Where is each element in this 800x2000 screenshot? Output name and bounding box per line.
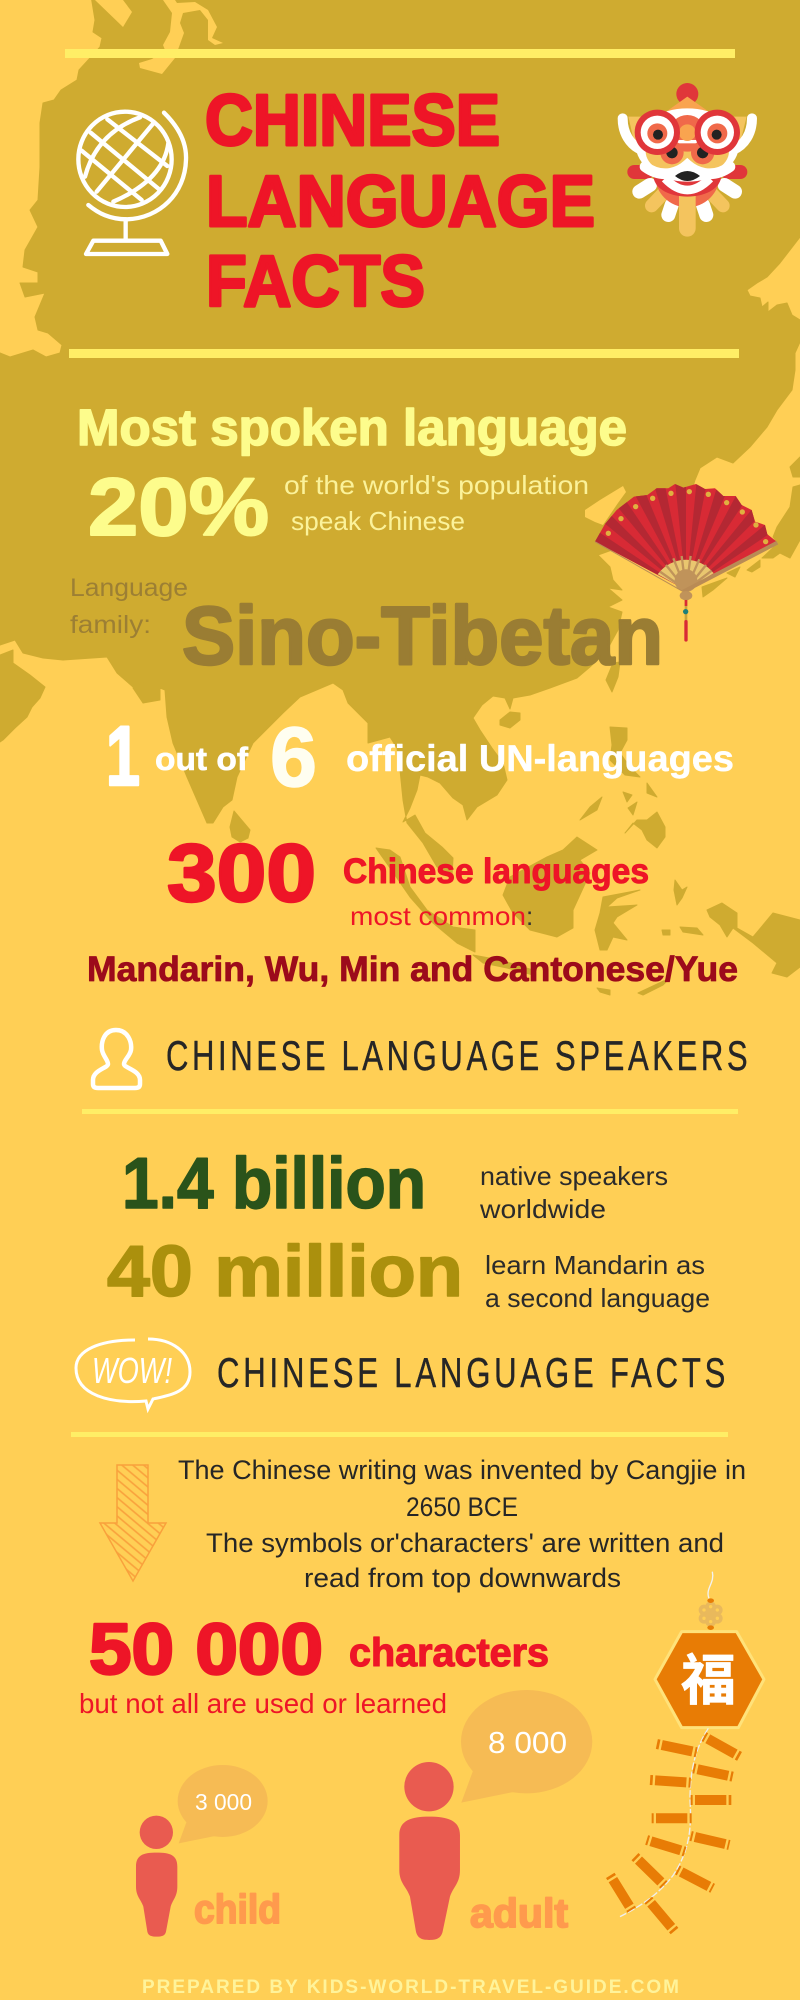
text: Chinese writing: The symbols or'characters' are written and xyxy=(206,1528,724,1558)
heading: Chinese language speakers: CHINESE LANGUAGE SPEAKERS xyxy=(166,1032,748,1079)
icon: wow speech bubble xyxy=(76,1339,190,1409)
text: world's population: speak Chinese xyxy=(291,506,465,536)
text: learn Mandarin xyxy=(485,1250,710,1313)
stat: 300 Chinese languages: 300 xyxy=(167,828,316,919)
stat: 1 out of 6 official UN-languages xyxy=(106,709,734,804)
text: language family: Language xyxy=(70,574,188,602)
stat: 50 000 characters: characters xyxy=(349,1631,549,1675)
heading: Chinese language facts: CHINESE LANGUAGE FACTS xyxy=(217,1349,725,1396)
icon: wow speech bubble: WOW! xyxy=(92,1350,172,1391)
icon: lucky charm with firecrackers: 福 xyxy=(681,1635,736,1715)
stat: 1 out of 6 official UN-languages: out of xyxy=(155,741,248,777)
footer credit: PREPARED BY KIDS-WORLD-TRAVEL-GUIDE.COM xyxy=(142,1977,679,1998)
heading: Sino-Tibetan: Sino-Tibetan xyxy=(182,589,663,682)
stat: 1.4 billion: 1.4 billion xyxy=(122,1144,426,1224)
stat: 1 out of 6 official UN-languages: official UN-languages xyxy=(346,738,734,779)
stat: 300 Chinese languages: Chinese languages xyxy=(343,852,649,891)
top title rule xyxy=(65,49,735,58)
text: most common languages: Mandarin, Wu, Min and Cantonese/Yue xyxy=(87,950,738,989)
text: world's population xyxy=(284,470,589,536)
stat: 50 000 characters: but not all are used or learned xyxy=(79,1688,447,1719)
title: CHINESE xyxy=(205,81,500,161)
text: Chinese writing: The Chinese writing was invented by Cangjie in xyxy=(178,1455,746,1485)
stat: 1 out of 6 official UN-languages: 1 xyxy=(106,709,140,803)
title xyxy=(205,81,595,322)
figure: child with speech bubble: 3 000 xyxy=(195,1789,252,1815)
icon: lion dance head xyxy=(623,83,752,228)
figure: adult with speech bubble: 8 000 xyxy=(488,1725,567,1760)
map of Asia xyxy=(0,0,800,995)
rule xyxy=(82,1109,738,1114)
stat: 50 000 characters xyxy=(79,1610,549,1719)
icon: hatched down arrow xyxy=(100,1465,166,1581)
text: learn Mandarin: learn Mandarin as xyxy=(485,1250,705,1280)
icon: person outline xyxy=(93,1030,140,1088)
text: Chinese writing: read from top downwards xyxy=(304,1563,621,1593)
bottom title rule xyxy=(69,349,739,358)
title: FACTS xyxy=(206,242,425,322)
icon: globe xyxy=(78,112,186,254)
text: native speakers: worldwide xyxy=(479,1194,606,1224)
text: Chinese writing: 2650 BCE xyxy=(406,1492,518,1522)
title: LANGUAGE xyxy=(206,162,595,242)
stat: 50 000 characters: 50 000 xyxy=(89,1610,323,1690)
stat: 300 Chinese languages xyxy=(167,828,649,931)
text: world's population: of the world's population xyxy=(284,470,589,500)
text: native speakers xyxy=(479,1161,668,1224)
text: learn Mandarin: a second language xyxy=(485,1283,710,1313)
figure: adult with speech bubble: adult xyxy=(470,1890,568,1936)
text: native speakers: native speakers xyxy=(480,1161,668,1191)
figure: child with speech bubble: child xyxy=(194,1886,281,1932)
icon: red fan xyxy=(586,477,780,640)
icon: lucky charm with firecrackers xyxy=(610,1572,764,1932)
rule xyxy=(71,1432,728,1437)
stat: 300 Chinese languages: : xyxy=(526,901,533,931)
text: Chinese writing xyxy=(178,1455,746,1593)
stat: 20%: 20% xyxy=(88,462,269,553)
figure: adult with speech bubble xyxy=(399,1690,592,1940)
stat: 1 out of 6 official UN-languages: 6 xyxy=(270,710,317,804)
figure: child with speech bubble xyxy=(136,1765,281,1937)
stat: 40 million: 40 million xyxy=(107,1232,463,1312)
stat: 300 Chinese languages: most common xyxy=(350,901,526,931)
text: language family: family: xyxy=(70,611,151,639)
heading: most spoken language: Most spoken language xyxy=(77,399,627,456)
text: language family xyxy=(70,574,188,639)
